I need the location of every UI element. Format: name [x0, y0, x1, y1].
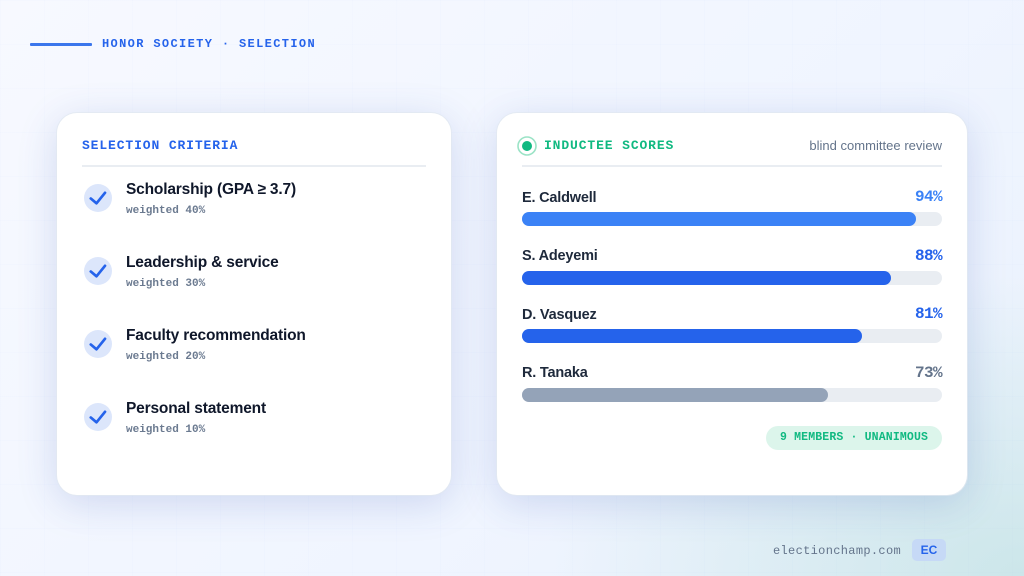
review note: blind committee review: [809, 138, 942, 153]
footer logo badge: [912, 539, 946, 561]
criterion weight: weighted 30%: [126, 278, 205, 290]
logo text: EC: [921, 543, 937, 557]
score row: Caldwell: [522, 188, 943, 226]
panel: selection criteria: [57, 113, 451, 495]
value: 94%: [915, 188, 942, 206]
icon: check: [84, 184, 112, 212]
icon: check: [84, 403, 112, 431]
name: E. Caldwell: [522, 190, 596, 206]
icon: check: [84, 330, 112, 358]
criterion text: Leadership & service: [126, 254, 279, 271]
icon: check: [84, 257, 112, 285]
footer site: electionchamp.com: [773, 544, 901, 558]
bar: [522, 270, 942, 284]
criterion: scholarship: [84, 181, 296, 217]
icon: status dot: [517, 136, 537, 156]
header eyebrow: [30, 37, 316, 51]
score row: Vasquez: [522, 305, 943, 343]
criterion: leadership: [84, 254, 279, 290]
header line: [30, 43, 92, 46]
panel heading: selection criteria: SELECTION CRITERIA: [82, 138, 238, 153]
criterion: faculty: [84, 327, 306, 363]
badge: members: [766, 426, 942, 450]
badge text: 9 MEMBERS · UNANIMOUS: [780, 431, 928, 444]
value: 73%: [915, 364, 942, 382]
criterion: statement: [84, 400, 266, 436]
criterion weight: weighted 10%: [126, 424, 205, 436]
criterion text: Scholarship (GPA ≥ 3.7): [126, 181, 296, 198]
name: D. Vasquez: [522, 306, 597, 322]
criterion text: Personal statement: [126, 400, 266, 417]
header title: HONOR SOCIETY · SELECTION: [102, 37, 316, 51]
score row: Tanaka: [522, 364, 943, 402]
score row: Adeyemi: [522, 246, 943, 285]
criterion text: Faculty recommendation: [126, 327, 306, 344]
bar: [522, 329, 942, 343]
panel: inductee scores: [497, 113, 967, 495]
value: 81%: [915, 305, 942, 323]
criterion weight: weighted 40%: [126, 205, 205, 217]
name: R. Tanaka: [522, 365, 588, 381]
panel heading: inductee scores: INDUCTEE SCORES: [544, 138, 674, 153]
criterion weight: weighted 20%: [126, 351, 205, 363]
value: 88%: [915, 246, 942, 264]
bar: [522, 212, 942, 226]
name: S. Adeyemi: [522, 248, 598, 264]
bar: [522, 388, 942, 402]
